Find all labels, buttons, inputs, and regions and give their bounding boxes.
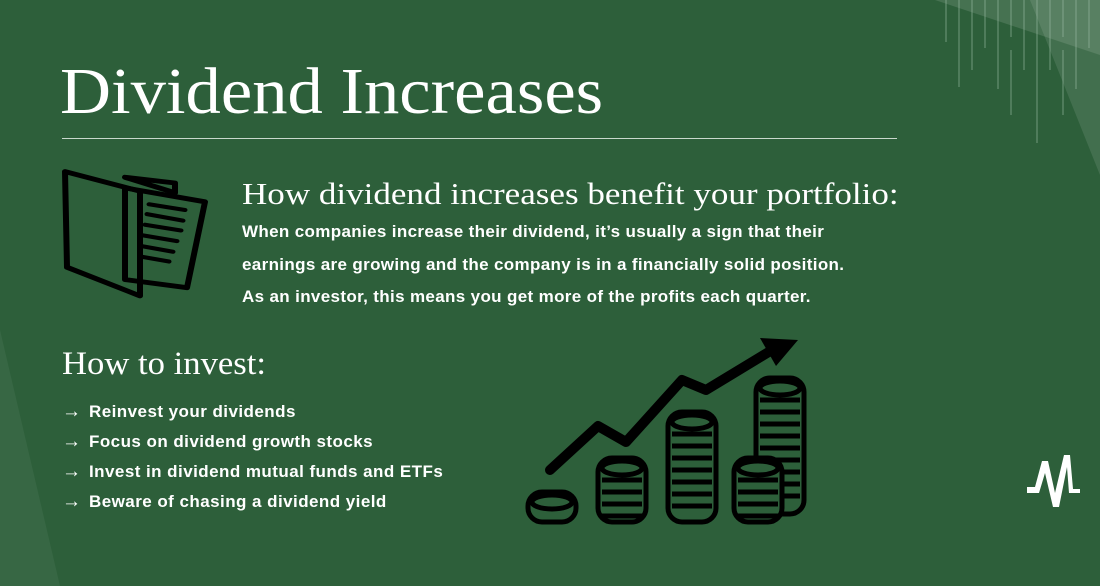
list: → — [62, 431, 81, 452]
list: Focus on dividend growth stocks — [89, 432, 373, 451]
list: Invest in dividend mutual funds and ETFs — [89, 462, 443, 481]
title: Dividend Increases — [60, 55, 603, 128]
list: Beware of chasing a dividend yield — [89, 492, 387, 511]
list: → — [62, 401, 81, 422]
list — [62, 401, 443, 512]
icon: folder with documents — [62, 169, 208, 298]
list: → — [62, 491, 81, 512]
body text: earnings are growing and the company is in a financially solid position. — [242, 254, 844, 274]
how to invest heading: How to invest: — [62, 346, 266, 382]
logo — [1027, 455, 1080, 507]
list: Reinvest your dividends — [89, 402, 296, 421]
chart: coins and arrow — [526, 338, 806, 524]
body text: When companies increase their dividend, it’s usually a sign that their — [242, 222, 824, 241]
body text — [242, 222, 844, 306]
list: → — [62, 461, 81, 482]
subheading: How dividend increases benefit your portfolio: — [242, 176, 899, 211]
body text: As an investor, this means you get more of the profits each quarter. — [242, 287, 811, 306]
